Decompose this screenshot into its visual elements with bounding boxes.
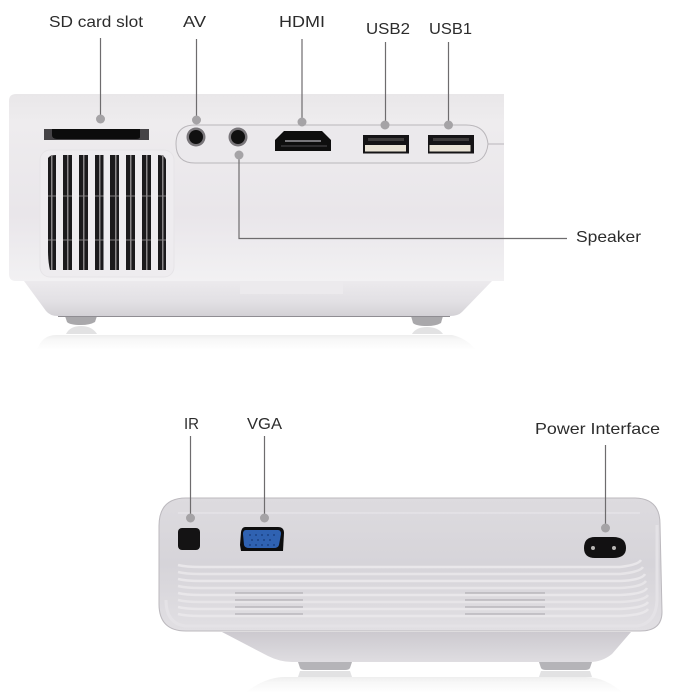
reflection: rear view xyxy=(37,335,476,350)
label: Power Interface: Power Interface xyxy=(535,421,660,438)
side vent shadows xyxy=(235,593,545,614)
port: USB1 xyxy=(428,135,474,154)
upper housing: rear view xyxy=(9,94,504,281)
label: HDMI: HDMI xyxy=(279,14,325,31)
label: SD card slot: SD card slot xyxy=(49,14,144,31)
illustration: projector side view xyxy=(159,498,662,693)
label: USB2: USB2 xyxy=(366,21,410,38)
port: power socket xyxy=(584,537,626,558)
upper housing: side view xyxy=(159,498,662,631)
side bevel xyxy=(166,525,657,626)
bottom edge: rear view xyxy=(58,316,450,318)
port: speaker jack xyxy=(228,128,248,146)
port: USB2 xyxy=(363,135,409,154)
label: VGA: VGA xyxy=(247,416,282,433)
port: HDMI xyxy=(275,131,331,151)
port panel xyxy=(176,125,504,163)
lower housing: side view xyxy=(222,632,631,662)
feet: rear view xyxy=(65,316,443,334)
reflection: side view xyxy=(245,677,623,693)
port: AV jack xyxy=(186,128,206,146)
vent grille xyxy=(40,150,174,277)
illustration: projector rear view xyxy=(9,94,504,350)
label: USB1: USB1 xyxy=(429,21,472,38)
feet: side view xyxy=(298,662,592,677)
port: VGA xyxy=(240,527,284,551)
port: SD card slot xyxy=(44,129,149,140)
label: AV: AV xyxy=(183,14,206,31)
front tab xyxy=(240,281,343,294)
callout lines and dots xyxy=(96,38,610,532)
label: Speaker: Speaker xyxy=(576,229,642,246)
sensor: IR xyxy=(178,528,200,550)
lower housing: rear view xyxy=(24,281,492,316)
top bevel xyxy=(178,512,640,514)
label: IR: IR xyxy=(184,416,199,433)
side vent ribs xyxy=(178,560,648,616)
